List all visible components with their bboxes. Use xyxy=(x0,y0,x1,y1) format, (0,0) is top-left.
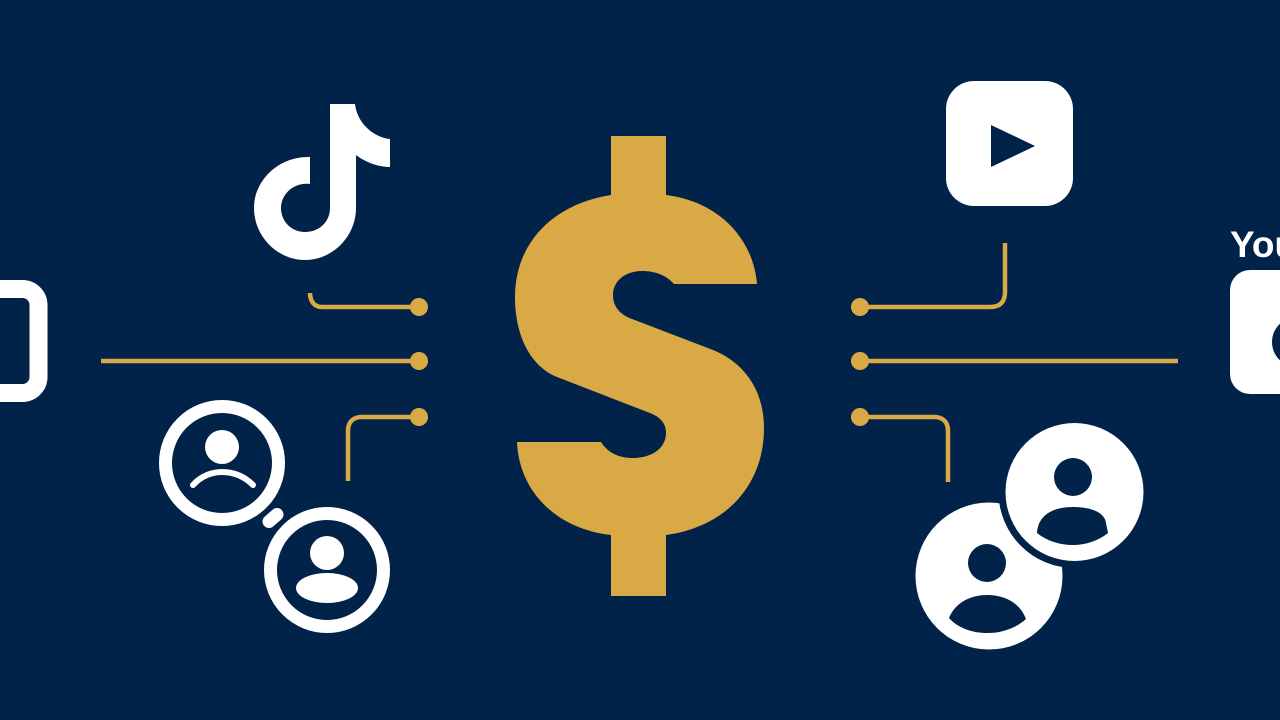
left connector lines xyxy=(101,293,428,481)
icon: linked outlined user circles xyxy=(166,406,384,626)
icon: gold dollar sign xyxy=(515,136,764,596)
link between user circles xyxy=(269,514,277,522)
connector: bottom right xyxy=(851,408,948,482)
right connector lines xyxy=(851,243,1178,482)
connector: top right xyxy=(851,243,1005,316)
connector: bottom left xyxy=(348,408,428,481)
outlined user with frown arc xyxy=(166,406,278,520)
outlined user with body xyxy=(270,514,384,626)
icon: outlined rounded square, left edge xyxy=(0,289,38,393)
icon: overlapping solid user circles xyxy=(916,416,1150,650)
icon: TikTok logo xyxy=(254,104,390,260)
icon: YouTube tile, right edge xyxy=(1230,270,1280,394)
connector: top left xyxy=(310,293,428,316)
connector: middle right xyxy=(851,352,1178,370)
icon: video play tile xyxy=(946,81,1073,206)
connector: middle left xyxy=(101,352,428,370)
solid user circle, upper xyxy=(998,416,1150,568)
solid user circle, lower xyxy=(916,502,1062,650)
